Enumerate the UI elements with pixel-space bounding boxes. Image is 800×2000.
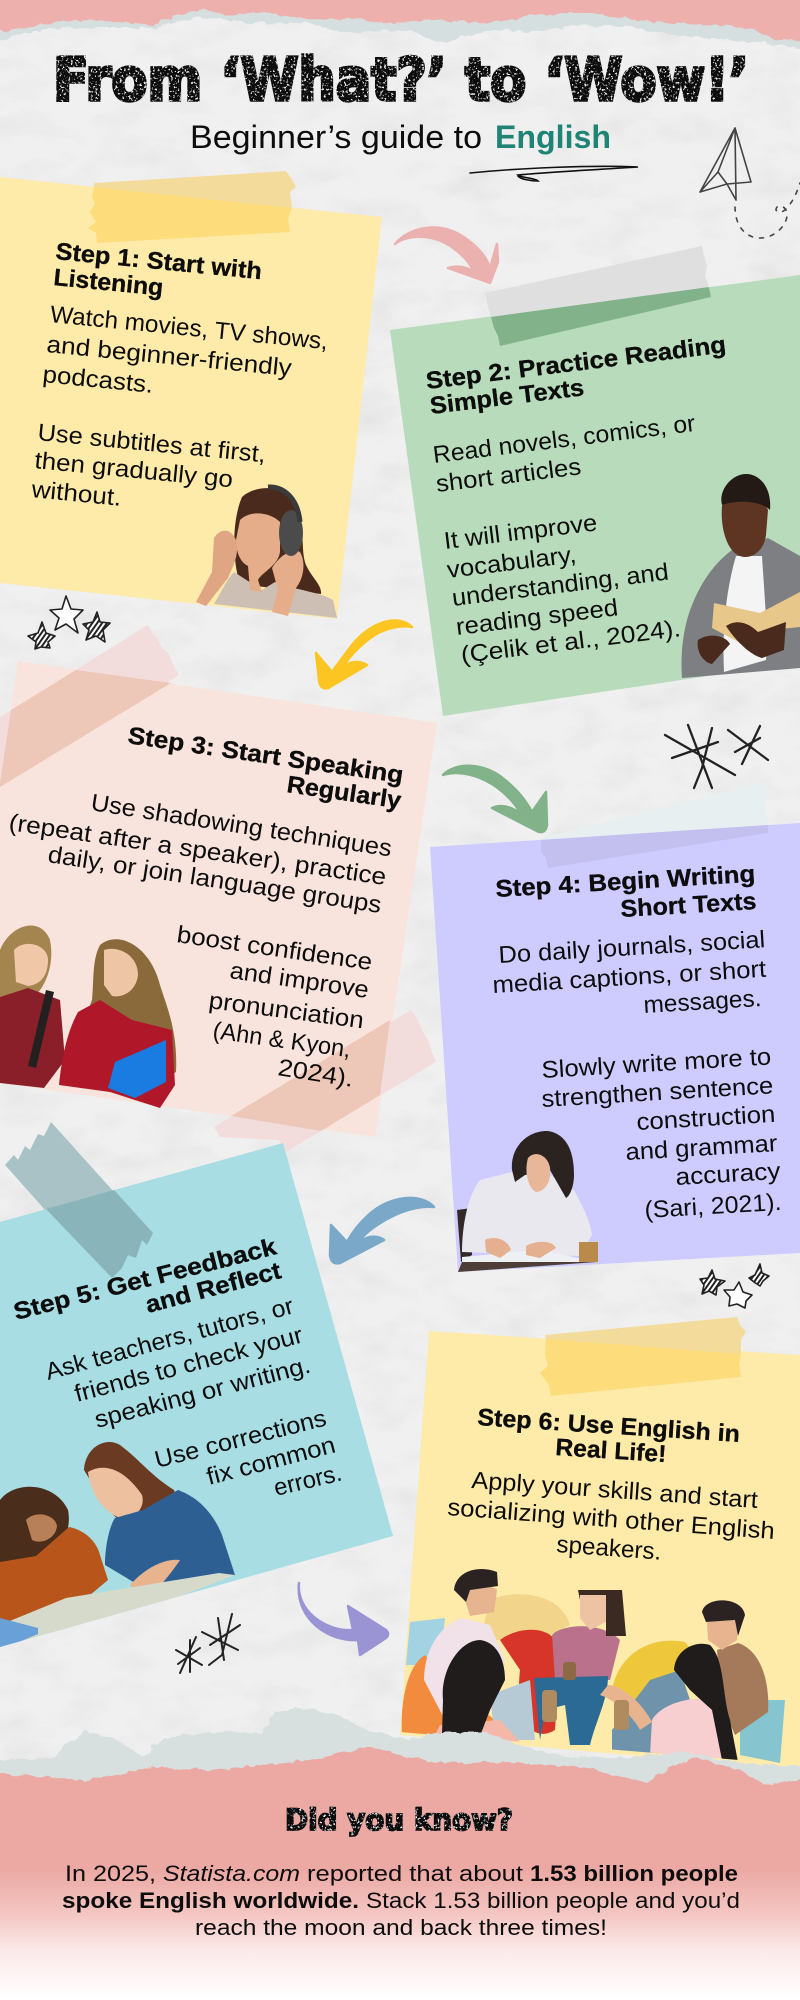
did you know body text: reported that about: [307, 1861, 524, 1886]
step 1 body text: Watch movies, TV shows,: [49, 301, 329, 355]
step 6 body text: Apply your skills and start: [471, 1467, 759, 1514]
step 3 card: [0, 661, 437, 1137]
step 5 body text: [42, 1293, 345, 1502]
did you know body text: In 2025,: [65, 1861, 156, 1886]
step 6 heading: Step 6: Use English in: [477, 1404, 741, 1448]
step 2 body text: (Çelik et al., 2024).: [459, 615, 682, 669]
step 5 tape lower: [46, 1190, 153, 1278]
subtitle: [190, 119, 611, 155]
step 5 body text: errors.: [271, 1460, 345, 1502]
step 2 heading: Step 2: Practice Reading: [424, 331, 727, 395]
arrow: blue: [330, 1198, 434, 1263]
step 2 body text: [431, 410, 697, 669]
panel: step 1: [0, 171, 382, 619]
step 4 body text: construction: [636, 1101, 776, 1136]
photo: woman writing: [457, 1131, 598, 1272]
step 1 heading: Step 1: Start with: [54, 238, 263, 285]
step 6 heading: [477, 1404, 741, 1468]
step 4 card: [430, 823, 800, 1272]
step 1 body text: then gradually go: [33, 447, 234, 493]
step 2 tape: [485, 246, 711, 346]
underline swoosh: [470, 166, 638, 181]
heading: did you know: Did you know?: [285, 1803, 513, 1837]
step 1 body text: and beginner-friendly: [45, 331, 293, 382]
step 1 body text: podcasts.: [41, 361, 155, 399]
step 5 heading: Step 5: Get Feedback: [11, 1233, 280, 1326]
did you know body text: reach the moon and back three times!: [195, 1915, 607, 1940]
did you know body text: spoke English worldwide.: [62, 1888, 359, 1913]
step 3 body text: (Ahn & Kyon,: [211, 1017, 353, 1063]
step 6 body text: [447, 1467, 776, 1566]
step 4 body text: accuracy: [675, 1158, 781, 1191]
step 5 body text: speaking or writing.: [92, 1352, 313, 1434]
step 3 heading: Step 3: Start Speaking: [126, 722, 405, 789]
photo: two women studying: [0, 1442, 235, 1650]
panel: step 3: [0, 625, 437, 1152]
step 2 body text: understanding, and: [450, 559, 670, 612]
photo: two women students: [0, 926, 176, 1108]
step 5 body text: friends to check your: [72, 1322, 306, 1408]
step 2 heading: [424, 331, 727, 420]
step 4 body text: [492, 926, 782, 1224]
step 3 body text: pronunciation: [207, 987, 365, 1034]
did you know body text: 1.53 billion people: [530, 1861, 738, 1886]
step 6 body text: socializing with other English: [447, 1494, 776, 1545]
step 1 heading: Listening: [52, 264, 165, 302]
sparkle doodles top: [665, 725, 768, 788]
step 6 tape: [540, 1317, 746, 1396]
arrow: yellow: [316, 620, 412, 688]
step 6 card: [400, 1331, 800, 1770]
step 3 heading: Regularly: [285, 771, 404, 815]
step 6 heading: Real Life!: [555, 1434, 667, 1468]
sparkle doodles lower: [176, 1614, 240, 1673]
step 4 body text: strengthen sentence: [541, 1072, 774, 1113]
step 2 body text: short articles: [434, 453, 583, 498]
step 2 body text: vocabulary,: [445, 541, 578, 584]
step 3 top tape: [0, 625, 179, 787]
step 2 body text: Read novels, comics, or: [431, 410, 697, 469]
photo: woman with headphones: [196, 487, 337, 618]
step 5 body text: fix common: [204, 1432, 338, 1491]
step 3 body text: daily, or join language groups: [46, 841, 383, 919]
step 3 body text: Use shadowing techniques: [89, 789, 394, 862]
step 6 body text: speakers.: [556, 1531, 662, 1566]
step 1 body text: [29, 301, 329, 512]
step 5 card: [0, 1143, 393, 1647]
panel: step 6: [400, 1317, 800, 1770]
panel: step 4: [430, 782, 800, 1272]
did you know body text: [62, 1861, 740, 1940]
did you know body text: Statista.com: [163, 1861, 300, 1886]
step 4 heading: [495, 861, 757, 923]
step 1 card: [0, 177, 382, 619]
top torn pink paper: [0, 0, 800, 50]
step 3 body text: and improve: [228, 957, 371, 1004]
step 2 body text: It will improve: [442, 509, 599, 555]
step 3 body text: boost confidence: [175, 921, 374, 976]
did you know body text: Stack 1.53 billion people and you’d: [366, 1888, 740, 1913]
step 4 heading: Step 4: Begin Writing: [495, 861, 756, 903]
step 4 body text: messages.: [643, 985, 762, 1019]
step 4 tape lower: [541, 825, 768, 868]
step 2 body text: reading speed: [454, 594, 620, 641]
step 4 tape upper: [541, 782, 768, 842]
photo: man reading a book: [681, 474, 800, 678]
panel: step 2: [390, 246, 800, 716]
step 5 body text: Use corrections: [152, 1405, 329, 1474]
subtitle: Beginner’s guide to: [190, 119, 482, 155]
step 5 tape upper: [5, 1122, 114, 1211]
step 3 bottom tape: [214, 1010, 436, 1152]
step 4 body text: Do daily journals, social: [498, 926, 766, 969]
step 4 heading: Short Texts: [620, 888, 757, 923]
step 4 body text: and grammar: [625, 1130, 778, 1166]
step 3 body text: [7, 789, 394, 1093]
step 3 body text: 2024).: [276, 1054, 355, 1093]
step 1 heading: [52, 238, 263, 302]
step 1 body text: without.: [29, 476, 123, 512]
photo: group of friends on beanbags: [402, 1569, 785, 1765]
arrow: green: [443, 766, 547, 832]
step 1 body text: Use subtitles at first,: [36, 419, 267, 468]
arrow: pink: [395, 228, 498, 283]
panel: step 5: [0, 1122, 393, 1650]
bottom torn pink paper: [0, 1708, 800, 2000]
icon: paper airplane: [700, 128, 800, 238]
step 5 heading: and Reflect: [143, 1257, 284, 1319]
step 5 body text: Ask teachers, tutors, or: [42, 1293, 297, 1386]
star doodles lower: [700, 1264, 769, 1308]
star doodles top: [28, 596, 110, 649]
step 1 tape: [88, 171, 296, 243]
step 3 body text: (repeat after a speaker), practice: [7, 809, 388, 891]
step 2 heading: Simple Texts: [428, 374, 586, 420]
step 4 body text: media captions, or short: [492, 956, 767, 999]
subtitle: English: [495, 119, 611, 155]
step 4 body text: (Sari, 2021).: [644, 1189, 782, 1224]
arrow: purple: [299, 1583, 388, 1655]
step 2 card: [390, 275, 800, 716]
step 3 heading: [126, 722, 405, 815]
step 4 body text: Slowly write more to: [541, 1043, 772, 1084]
